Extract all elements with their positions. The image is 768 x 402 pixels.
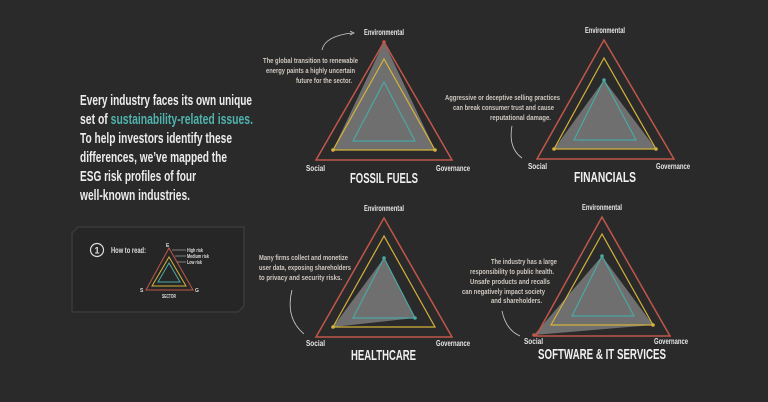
chart: fossil fuels: Environmental	[364, 28, 404, 37]
icon: number 1	[90, 244, 104, 256]
legend triangles	[146, 248, 193, 290]
intro text: differences, we’ve mapped the	[80, 149, 227, 166]
panel: how to read	[72, 227, 244, 312]
chart: software & IT services	[462, 203, 688, 363]
panel: how to read: Medium risk	[187, 254, 209, 260]
panel: how to read: High risk	[187, 248, 203, 254]
panel: how to read: S	[140, 288, 144, 294]
panel: how to read: SECTOR	[162, 294, 176, 300]
chart: software & IT services: The industry has a large	[491, 259, 557, 266]
panel: how to read: E	[166, 243, 170, 249]
intro text: set of sustainability-related issues.	[80, 111, 253, 128]
chart: software & IT services: Governance	[654, 337, 688, 346]
chart: healthcare	[259, 204, 470, 364]
chart: healthcare: HEALTHCARE	[351, 347, 416, 364]
chart: financials: Aggressive or deceptive selling practices	[445, 95, 560, 102]
panel: how to read: G	[195, 288, 199, 294]
chart: financials: reputational damage.	[490, 115, 551, 122]
chart: financials: FINANCIALS	[574, 169, 636, 186]
chart: healthcare: Many firms collect and monetize	[259, 255, 348, 262]
chart: healthcare: Social	[306, 339, 325, 348]
icon: number 1: 1	[94, 246, 100, 256]
chart: fossil fuels	[263, 28, 470, 187]
chart: financials: Social	[528, 162, 547, 171]
chart: software & IT services: SOFTWARE & IT SERVICES	[538, 346, 666, 363]
intro text: To help investors identify these	[80, 130, 232, 147]
intro text: ESG risk profiles of four	[80, 168, 196, 185]
chart: fossil fuels: The global transition to renewable	[263, 58, 358, 65]
chart: healthcare: user data, exposing shareholders	[259, 265, 351, 272]
chart: fossil fuels: FOSSIL FUELS	[350, 170, 418, 187]
chart: fossil fuels: future for the sector.	[296, 78, 352, 85]
chart: fossil fuels: energy paints a highly uncertain	[266, 68, 355, 75]
chart: financials: can break consumer trust and cause	[453, 105, 554, 112]
chart: healthcare: Environmental	[364, 204, 404, 213]
chart: healthcare: Governance	[436, 339, 470, 348]
intro text: Every industry faces its own unique	[80, 92, 252, 109]
chart: software & IT services: responsibility to public health.	[470, 269, 554, 276]
intro text: well-known industries.	[79, 187, 190, 204]
chart: financials: Governance	[656, 162, 690, 171]
intro text	[79, 92, 253, 204]
chart: fossil fuels: Social	[306, 164, 325, 173]
chart: software & IT services: Social	[524, 337, 543, 346]
chart: fossil fuels: Governance	[436, 164, 470, 173]
chart: software & IT services: Environmental	[582, 203, 622, 212]
chart: financials: Environmental	[585, 26, 625, 35]
chart: software & IT services: and shareholders.	[491, 298, 542, 305]
legend label: How to read:	[111, 246, 146, 255]
chart: software & IT services: can negatively impact society	[462, 289, 545, 296]
panel: how to read: Low risk	[187, 260, 202, 266]
chart: healthcare: to privacy and security risks.	[259, 275, 342, 282]
chart: financials	[445, 26, 690, 186]
chart: software & IT services: Unsafe products and recalls	[470, 279, 550, 286]
